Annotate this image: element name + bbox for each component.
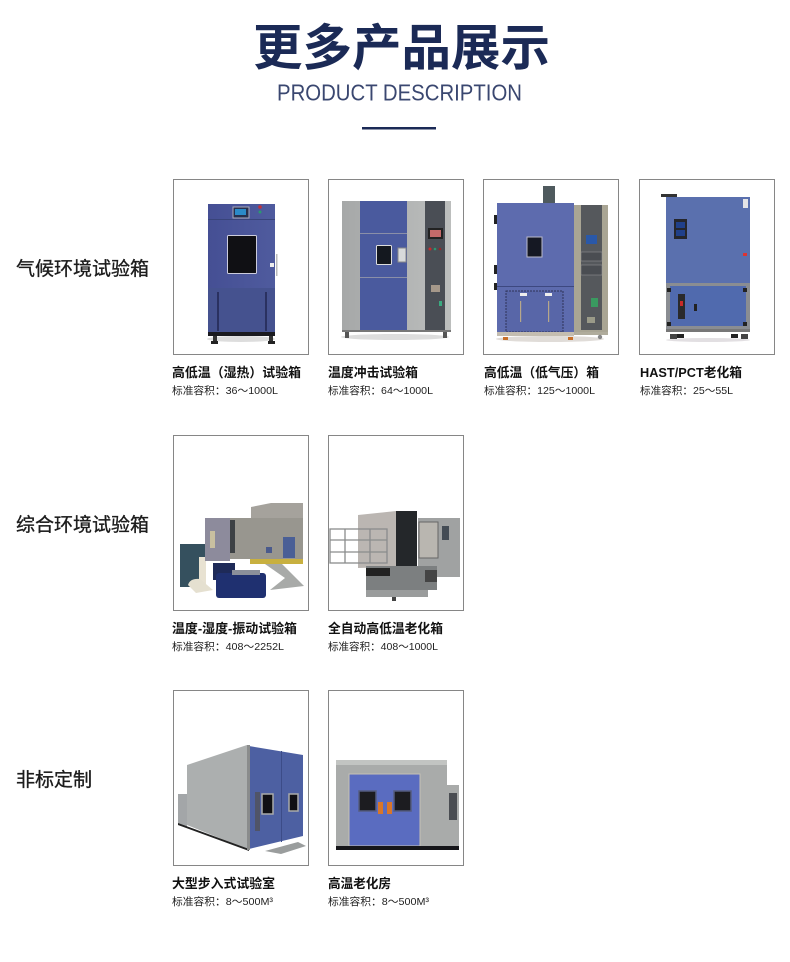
product name: 高温老化房 xyxy=(328,876,391,891)
product name: 高低温（低气压）箱 xyxy=(484,365,599,380)
product card: temperature humidity vibration chamber xyxy=(172,436,308,653)
product name: 高低温（湿热）试验箱 xyxy=(172,365,301,380)
capacity: 标准容积：408～1000L xyxy=(328,640,438,653)
title: 更多产品展示 xyxy=(253,21,550,76)
capacity: 标准容积：25～55L xyxy=(640,384,733,397)
product card: low pressure chamber xyxy=(484,180,618,397)
category: climate chambers: 气候环境试验箱 xyxy=(16,258,149,280)
product card: HAST/PCT aging chamber xyxy=(640,180,774,397)
capacity: 标准容积：64～1000L xyxy=(328,384,433,397)
capacity: 标准容积：8～500M³ xyxy=(328,895,430,908)
product card: automatic aging chamber xyxy=(328,436,464,653)
product card: thermal shock chamber xyxy=(328,180,464,397)
category: combined environment chambers: 综合环境试验箱 xyxy=(16,514,149,536)
product name: 温度冲击试验箱 xyxy=(328,365,418,380)
category: non-standard custom: 非标定制 xyxy=(16,769,92,791)
product name: 大型步入式试验室 xyxy=(172,876,275,891)
product card: large walk-in chamber xyxy=(172,690,308,908)
product name: HAST/PCT老化箱 xyxy=(640,365,742,380)
product card: high temperature aging room xyxy=(328,690,464,908)
capacity: 标准容积：36～1000L xyxy=(172,384,278,397)
title underline xyxy=(362,127,436,130)
capacity: 标准容积：125～1000L xyxy=(484,384,595,397)
capacity: 标准容积：408～2252L xyxy=(172,640,284,653)
capacity: 标准容积：8～500M³ xyxy=(172,895,274,908)
product name: 全自动高低温老化箱 xyxy=(328,621,443,636)
subtitle: PRODUCT DESCRIPTION xyxy=(277,80,522,106)
product card: high-low temperature humidity chamber xyxy=(172,180,308,397)
product name: 温度-湿度-振动试验箱 xyxy=(172,621,297,636)
